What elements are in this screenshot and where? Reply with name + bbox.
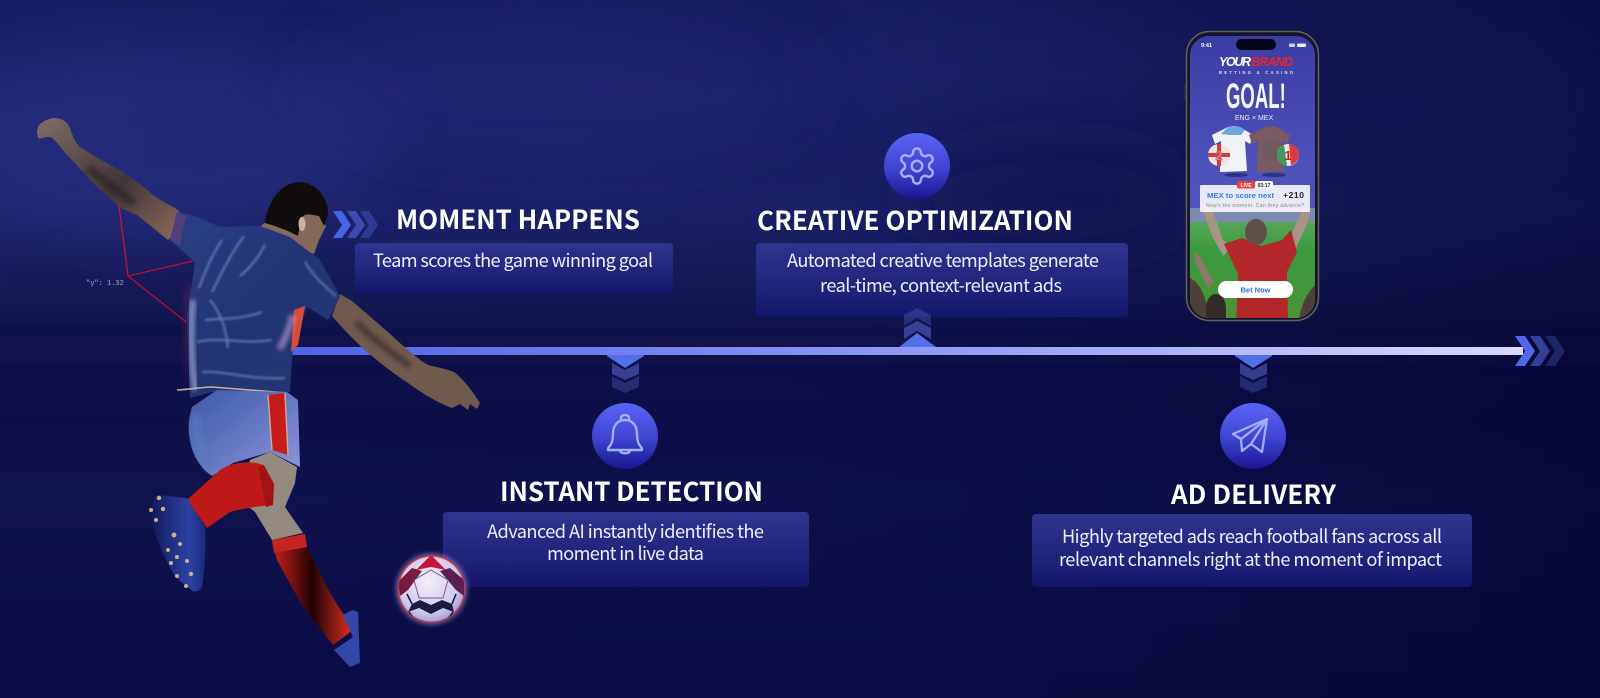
connector chevrons up	[899, 308, 936, 347]
connector chevrons down	[1235, 355, 1272, 393]
description box: instant detection	[443, 512, 809, 587]
heading: creative optimization: CREATIVE OPTIMIZATION	[757, 201, 1073, 238]
description box: ad delivery: relevant channels right at the moment of impact	[1059, 546, 1442, 572]
lower sock	[272, 534, 353, 645]
live odds card: +210	[1283, 190, 1304, 200]
step: creative optimization	[756, 133, 1128, 347]
right arm	[332, 294, 480, 410]
team jerseys	[1208, 126, 1299, 177]
live odds card: 03:17	[1258, 183, 1271, 189]
moment happens: chevrons	[333, 211, 378, 238]
motion-tracking lines: "y": 1.32	[86, 280, 124, 288]
description box: ad delivery: Highly targeted ads reach football fans across all	[1062, 523, 1442, 549]
motion-tracking lines	[86, 206, 193, 322]
heading: moment happens: MOMENT HAPPENS	[396, 200, 640, 237]
brand logo	[1219, 57, 1293, 74]
team jerseys: 2	[1215, 148, 1223, 163]
kicking leg skin	[240, 452, 303, 540]
timeline arrow	[292, 336, 1565, 366]
icon: paper plane	[1220, 403, 1286, 469]
description box: creative optimization: real-time, context-relevant ads	[820, 272, 1062, 298]
description box: ad delivery	[1032, 514, 1472, 587]
icon: gear	[884, 133, 950, 199]
brand logo: BETTING & CASINO	[1219, 70, 1294, 75]
description box: moment happens	[355, 243, 673, 293]
connector chevrons down	[607, 355, 644, 393]
live odds card	[1200, 181, 1310, 212]
goal headline: GOAL!	[1226, 75, 1286, 116]
soccer ball	[396, 553, 468, 625]
upper sock	[187, 462, 274, 528]
shorts	[189, 390, 300, 476]
icon: bell	[592, 403, 658, 469]
match label: ENG × MEX	[1235, 115, 1273, 122]
status bar: 9:41	[1201, 43, 1212, 49]
step: instant detection	[443, 355, 809, 587]
brand logo: BRAND	[1251, 55, 1293, 69]
step: moment happens	[355, 200, 673, 293]
jersey	[170, 212, 340, 398]
step: ad delivery	[1032, 355, 1472, 587]
description box: instant detection: moment in live data	[547, 540, 704, 566]
crowd and pitch photo	[1190, 204, 1315, 324]
front boot	[334, 610, 360, 667]
team jerseys: 1	[1284, 148, 1292, 163]
phone mockup	[1184, 30, 1320, 324]
arrow head chevrons	[1515, 336, 1565, 366]
description box: creative optimization: Automated creative templates generate	[787, 247, 1099, 273]
brand logo: YOUR	[1219, 55, 1251, 69]
description box: moment happens: Team scores the game winning goal	[373, 247, 653, 273]
heading: instant detection: INSTANT DETECTION	[500, 472, 763, 509]
bet now button: Bet Now	[1240, 286, 1271, 294]
rear boot	[149, 495, 205, 591]
live odds card: LIVE	[1240, 183, 1252, 189]
heading: ad delivery: AD DELIVERY	[1170, 475, 1337, 512]
head	[258, 182, 328, 254]
raised arm	[37, 118, 188, 240]
player illustration	[37, 118, 480, 667]
live odds card: MEX to score next	[1207, 191, 1274, 200]
live odds card: Now's the moment. Can they advance?	[1206, 203, 1304, 209]
bet now button	[1218, 281, 1293, 298]
description box: creative optimization	[756, 243, 1128, 317]
description box: instant detection: Advanced AI instantly identifies the	[487, 518, 764, 544]
